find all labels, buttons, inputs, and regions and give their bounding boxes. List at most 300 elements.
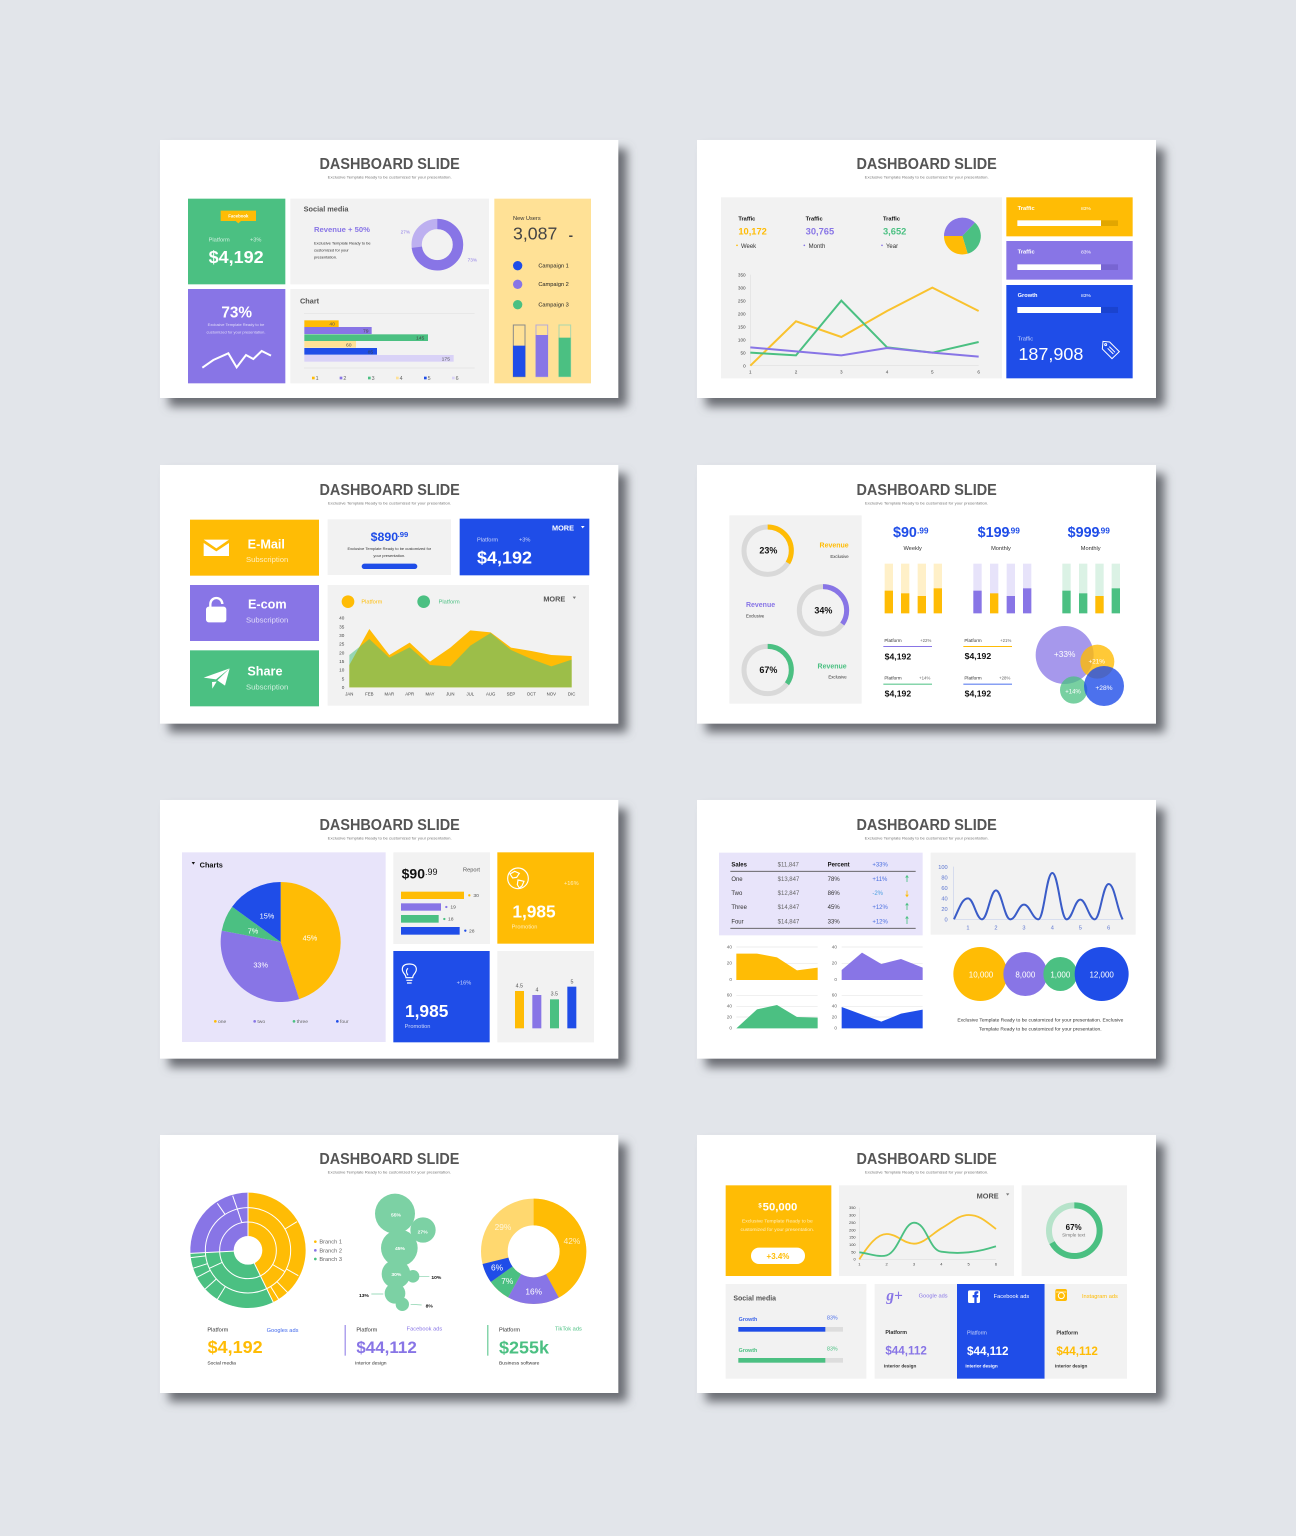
subtitle: Exclusive Template Ready to be customized for your presentation. xyxy=(328,835,452,840)
area chart yellow: 0 xyxy=(729,977,732,982)
panel: report: 30 xyxy=(473,893,479,899)
panel: sales table: Three xyxy=(731,905,748,911)
panel: facebook ads: Interior design xyxy=(965,1364,998,1369)
stat: social media: Googles ads xyxy=(267,1328,299,1334)
panel: instagram ads: Interior design xyxy=(1055,1364,1087,1369)
venn bubbles: +14% xyxy=(1065,689,1081,695)
panel: bar chart: 85 xyxy=(368,349,373,355)
platform stats: +28% xyxy=(999,675,1010,680)
panel: price: Exclusive Template Ready to be customized for xyxy=(348,546,432,551)
panel: bar chart: 4 xyxy=(400,376,403,382)
panel: traffic yellow: Traffic xyxy=(1018,206,1035,212)
panel: price: .99 xyxy=(398,530,408,539)
panel: area chart: 5 xyxy=(342,676,345,681)
panel: promotion blue: +16% xyxy=(457,981,471,987)
panel: traffic yellow: 83% xyxy=(1081,206,1092,212)
donut chart: 29% xyxy=(495,1222,512,1232)
platform stats: +22% xyxy=(920,638,931,643)
panel: new users xyxy=(494,199,591,383)
subtitle: Exclusive Template Ready to be customized for your presentation. xyxy=(865,835,989,840)
panel: growth blue: Traffic xyxy=(1018,336,1033,342)
panel: wave chart: 60 xyxy=(941,886,948,892)
donut chart xyxy=(491,1212,581,1296)
panel: social media: presentation. xyxy=(314,254,337,259)
platform stats: $4,192 xyxy=(885,651,911,661)
panel: curve chart: 200 xyxy=(849,1227,856,1232)
panel: sales table: $14,847 xyxy=(778,905,800,911)
panel: facebook ads xyxy=(957,1284,1045,1379)
bubble chain chart: 8% xyxy=(426,1304,433,1310)
panel: curve chart xyxy=(839,1185,1014,1276)
legend: three xyxy=(297,1019,308,1025)
panel: report: 28 xyxy=(469,928,475,934)
panel: revenue gauges: Revenue xyxy=(746,602,775,609)
panel: e-mail: E-Mail xyxy=(248,537,285,551)
stat: interior design: Interior design xyxy=(355,1361,387,1367)
icon: instagram xyxy=(1055,1289,1067,1301)
number bubbles xyxy=(953,947,1129,1001)
stat: interior design: Facebook ads xyxy=(407,1327,442,1333)
panel: social media growth: Social media xyxy=(733,1296,776,1303)
panel: traffic line chart: Month xyxy=(809,244,825,250)
line chart: 6 xyxy=(977,369,980,374)
panel: report: .99 xyxy=(425,867,437,877)
panel: traffic line chart: 10,172 xyxy=(738,227,767,237)
stat: business software xyxy=(487,1325,582,1367)
panel: e-com: E-com xyxy=(248,598,287,612)
panel: sales table: Two xyxy=(731,891,743,897)
panel: revenue gauges: Exclusive xyxy=(830,554,849,559)
venn bubbles: +21% xyxy=(1088,659,1105,666)
line chart: 3 xyxy=(840,369,843,374)
subtitle: Exclusive Template Ready to be customized for your presentation. xyxy=(865,500,988,505)
panel: area chart: SEP xyxy=(507,691,515,696)
icon: globe xyxy=(508,868,528,889)
panel: small bar chart: 4 xyxy=(536,987,539,993)
panel: promotion blue xyxy=(393,951,490,1042)
panel: area chart: DIC xyxy=(568,691,575,696)
panel: promotion yellow: +16% xyxy=(564,881,579,887)
bubble chain chart: 13% xyxy=(359,1293,370,1299)
panel: instagram ads: Platform xyxy=(1056,1330,1078,1336)
panel: revenue gauges: Revenue xyxy=(820,543,849,550)
panel: 50,000: Exclusive Template Ready to be xyxy=(742,1218,813,1224)
area chart blue xyxy=(832,993,923,1030)
area chart yellow: 40 xyxy=(727,944,732,949)
panel: social media xyxy=(290,199,489,284)
panel: area chart: 40 xyxy=(339,616,345,621)
panel: platform: Platform xyxy=(477,537,498,543)
panel: wave chart: 20 xyxy=(941,907,948,913)
area chart green: 60 xyxy=(727,993,732,998)
panel: social media growth: 83% xyxy=(827,1315,838,1321)
panel: e-com xyxy=(190,585,319,641)
sunburst legend xyxy=(314,1240,342,1263)
panel: area chart: JUN xyxy=(446,691,455,696)
panel: platform: +3% xyxy=(519,537,530,543)
area chart purple: 0 xyxy=(834,977,837,982)
panel: new users: Campaign 3 xyxy=(538,302,569,308)
panel: gauge 67%: Simple text xyxy=(1062,1233,1086,1238)
panel: new users: 3,087 xyxy=(513,223,557,243)
panel: report: 18 xyxy=(448,917,454,923)
panel: instagram ads: Instagram ads xyxy=(1082,1294,1118,1300)
panel: sales table: $13,847 xyxy=(778,877,800,883)
panel: sales table: Four xyxy=(731,919,744,925)
line chart: 50 xyxy=(740,350,746,355)
panel: growth blue: Growth xyxy=(1018,293,1038,299)
caption xyxy=(957,1018,1124,1032)
gauge 23%: 23% xyxy=(759,546,777,556)
panel: instagram ads: $44,112 xyxy=(1056,1345,1098,1358)
bubble chain chart xyxy=(359,1194,442,1311)
icon: price tag xyxy=(1102,341,1119,359)
pie: 45% xyxy=(303,933,318,942)
area chart blue: 20 xyxy=(832,1014,837,1019)
platform stats: +14% xyxy=(919,675,930,680)
panel: gauge 67%: 67% xyxy=(1066,1223,1082,1232)
gauge 23% xyxy=(744,527,791,574)
panel: 73 percent: 73% xyxy=(221,305,252,322)
panel: facebook platform: Platform xyxy=(209,237,230,243)
panel: platform: MORE xyxy=(552,524,574,533)
panel: sales table: +12% xyxy=(872,905,888,911)
panel: area chart: 35 xyxy=(339,624,345,629)
price monthly green with bars: .99 xyxy=(1098,525,1110,535)
panel: small bar chart: 5 xyxy=(571,979,574,985)
number bubbles: 1,000 xyxy=(1050,971,1071,980)
panel: share xyxy=(190,650,319,706)
price monthly with bars: $199 xyxy=(978,525,1010,541)
panel: gauge 67% xyxy=(1022,1185,1127,1276)
panel: new users: Campaign 1 xyxy=(538,263,569,269)
stat: social media: Social media xyxy=(207,1361,236,1367)
stat: interior design: Platform xyxy=(356,1327,378,1333)
panel: sales table: +12% xyxy=(872,919,888,925)
panel: curve chart: 6 xyxy=(995,1262,998,1267)
panel: sales table: $11,847 xyxy=(778,863,800,869)
panel: social media growth xyxy=(726,1284,866,1379)
icon: envelope xyxy=(204,540,229,556)
panel: sales table: 45% xyxy=(828,905,840,911)
panel: area chart: MORE xyxy=(543,595,565,604)
panel: revenue gauges: Exclusive xyxy=(746,614,765,619)
panel: curve chart: 1 xyxy=(858,1262,861,1267)
slide 5: charts dashboard xyxy=(160,800,627,1067)
panel: sales table: +33% xyxy=(872,863,888,869)
panel: promotion yellow xyxy=(497,852,594,944)
panel: area chart: Platform xyxy=(361,599,383,605)
number bubbles: 10,000 xyxy=(969,971,994,980)
number bubbles: 8,000 xyxy=(1015,971,1036,980)
legend xyxy=(214,1019,349,1025)
panel: platform xyxy=(460,519,589,575)
gauge 67% xyxy=(744,646,791,694)
bubble chain chart: 45% xyxy=(395,1246,406,1252)
panel: area chart: Platform xyxy=(439,599,460,605)
panel: facebook platform xyxy=(188,199,285,284)
panel: social media: Exclusive Template Ready to be xyxy=(314,240,371,245)
panel: curve chart: 150 xyxy=(849,1235,856,1240)
panel: sales table: -2% xyxy=(872,891,884,897)
subtitle: Exclusive Template Ready to be customized for your presentation. xyxy=(865,174,989,179)
icon: google plus: g+ xyxy=(885,1288,903,1305)
panel: 50,000: customized for your presentation. xyxy=(740,1227,814,1233)
panel: area chart: JAN xyxy=(345,691,353,696)
stat: business software: Business software xyxy=(499,1361,540,1367)
title: DASHBOARD SLIDE xyxy=(319,156,460,173)
slide 7: platforms dashboard xyxy=(160,1135,627,1402)
panel: platform: $4,192 xyxy=(477,547,532,567)
panel: share: Subscription xyxy=(246,683,288,692)
price weekly with bars xyxy=(885,525,942,613)
title: DASHBOARD SLIDE xyxy=(319,1151,460,1168)
price monthly with bars xyxy=(973,525,1031,613)
donut chart: 7% xyxy=(501,1276,514,1286)
panel: curve chart: 3 xyxy=(913,1262,916,1267)
area chart green: 0 xyxy=(729,1025,732,1030)
panel: promotion yellow: Promotion xyxy=(512,925,537,931)
gauge 67%: 67% xyxy=(759,665,777,675)
gauge 34%: 34% xyxy=(814,605,832,615)
area chart green xyxy=(727,993,818,1030)
panel: 73 percent xyxy=(188,289,285,383)
area chart yellow: 20 xyxy=(727,961,732,966)
panel: bar chart: 145 xyxy=(416,336,425,342)
panel: facebook platform: $4,192 xyxy=(209,247,264,267)
panel: curve chart: 0 xyxy=(853,1257,856,1262)
panel: wave chart: 0 xyxy=(945,917,948,923)
line chart: 1 xyxy=(749,369,752,374)
panel: google ads: Platform xyxy=(885,1330,907,1336)
panel: area chart: FEB xyxy=(365,691,374,696)
panel: curve chart: 100 xyxy=(849,1242,856,1247)
line chart: 250 xyxy=(738,298,746,303)
panel: bar chart: 2 xyxy=(343,376,346,382)
panel: social media growth: Growth xyxy=(739,1317,757,1323)
price monthly green with bars xyxy=(1062,525,1120,613)
panel: traffic line chart: Traffic xyxy=(806,217,823,223)
panel: social media: Revenue + 50% xyxy=(314,225,370,234)
stat: social media: Platform xyxy=(207,1327,229,1333)
icon: lock xyxy=(206,598,226,622)
panel: report: $90 xyxy=(402,866,425,882)
area chart green: 40 xyxy=(727,1004,732,1009)
bubble chain chart: 10% xyxy=(431,1275,442,1281)
panel: traffic yellow xyxy=(1006,197,1133,236)
sunburst legend: Branch 3 xyxy=(319,1257,342,1263)
panel: 73 percent: Exclusive Template Ready to be xyxy=(208,322,265,327)
panel: 50,000: +3.4% xyxy=(767,1252,789,1261)
panel: curve chart: 350 xyxy=(849,1205,856,1210)
panel: promotion blue: 1,985 xyxy=(405,1001,449,1021)
panel: curve chart: MORE xyxy=(977,1192,999,1201)
panel: sales table: +11% xyxy=(872,877,888,883)
panel: area chart: 25 xyxy=(339,642,345,647)
panel: sales table: 78% xyxy=(828,877,840,883)
donut chart: 42% xyxy=(564,1236,581,1246)
panel: 50,000: $ xyxy=(758,1204,762,1210)
area chart green: 20 xyxy=(727,1014,732,1019)
bubble chain chart: 30% xyxy=(391,1272,402,1278)
panel: wave chart: 100 xyxy=(938,865,948,871)
pie: 33% xyxy=(253,961,268,970)
title: DASHBOARD SLIDE xyxy=(856,1151,997,1168)
panel: curve chart: 250 xyxy=(849,1220,856,1225)
platform stats: $4,192 xyxy=(965,651,991,661)
panel: bar chart: Chart xyxy=(300,296,320,305)
area chart yellow xyxy=(727,944,818,982)
slide 3: subscriptions dashboard xyxy=(160,465,627,732)
slide 1: social media dashboard xyxy=(160,140,627,407)
line chart: 150 xyxy=(738,324,746,329)
icon: paper plane xyxy=(204,668,230,689)
panel: facebook ads: Facebook ads xyxy=(994,1294,1029,1300)
panel: revenue gauges: Revenue xyxy=(818,664,847,671)
subtitle: Exclusive Template Ready to be customized for your presentation. xyxy=(328,500,451,505)
platform stats: Platform xyxy=(884,675,902,680)
panel: bar chart: 6 xyxy=(456,376,459,382)
price monthly green with bars: Monthly xyxy=(1081,546,1101,552)
panel: bar chart: 3 xyxy=(372,376,375,382)
panel: social media: 73% xyxy=(468,257,477,262)
panel: traffic line chart: 30,765 xyxy=(806,227,834,237)
panel: facebook ads: Platform xyxy=(967,1330,987,1336)
panel: area chart: 15 xyxy=(339,659,345,664)
panel: google ads xyxy=(875,1284,957,1379)
number bubbles: 12,000 xyxy=(1089,971,1114,980)
panel: social media: Social media xyxy=(304,205,349,214)
venn bubbles xyxy=(1036,626,1124,706)
subtitle: Exclusive Template Ready to be customized for your presentation. xyxy=(865,1169,988,1174)
sunburst legend: Branch 2 xyxy=(319,1248,342,1254)
slide 2: traffic dashboard xyxy=(697,140,1165,407)
pie: 15% xyxy=(260,912,275,921)
panel: bar chart: 1 xyxy=(316,376,319,382)
panel: area chart: APR xyxy=(405,691,414,696)
panel: bar chart: 79 xyxy=(363,329,369,335)
panel: area chart: MAR xyxy=(385,691,394,696)
panel: pie chart xyxy=(182,852,386,1042)
panel: sales table: 33% xyxy=(828,919,840,925)
panel: small bar chart: 4.5 xyxy=(516,983,523,989)
price monthly with bars: .99 xyxy=(1008,525,1020,535)
caption: Exclusive Template Ready to be customized for your presentation. Exclusive xyxy=(957,1018,1124,1023)
panel: sales table xyxy=(719,853,923,935)
panel: curve chart: 2 xyxy=(886,1262,889,1267)
panel: e-mail: Subscription xyxy=(246,555,288,564)
pie chart xyxy=(944,218,981,254)
legend: four xyxy=(340,1019,349,1025)
panel: area chart: NOV xyxy=(547,691,556,696)
panel: traffic purple: Traffic xyxy=(1018,250,1035,256)
panel: bar chart: 60 xyxy=(346,342,352,348)
panel: bar chart xyxy=(290,289,489,383)
panel: traffic line chart: Year xyxy=(886,244,898,250)
area chart purple: 20 xyxy=(832,961,837,966)
panel: area chart: AUG xyxy=(486,691,496,696)
stat: social media xyxy=(207,1327,299,1367)
panel: report: 19 xyxy=(450,905,456,911)
panel: report xyxy=(393,852,490,944)
panel: share: Share xyxy=(247,665,283,679)
panel: area chart: JUL xyxy=(466,691,475,696)
panel: promotion blue: Promotion xyxy=(405,1024,430,1030)
panel: 73 percent: customized for your presentation. xyxy=(207,329,265,334)
panel: new users: - xyxy=(569,227,573,242)
panel: new users: Campaign 2 xyxy=(538,282,569,288)
panel: area chart: 10 xyxy=(339,668,345,673)
panel: 50,000 xyxy=(726,1185,831,1276)
area chart purple xyxy=(832,944,923,982)
line chart: 350 xyxy=(738,272,746,277)
panel: area chart: 20 xyxy=(339,650,345,655)
title: DASHBOARD SLIDE xyxy=(319,817,460,834)
trend arrows xyxy=(906,876,908,924)
panel: traffic line chart xyxy=(721,197,1002,378)
line chart: 2 xyxy=(795,369,798,374)
platform stats: Platform xyxy=(964,638,982,643)
panel: curve chart: 300 xyxy=(849,1212,856,1217)
panel: google ads: $44,112 xyxy=(885,1345,927,1358)
panel: report: Report xyxy=(463,868,480,874)
subtitle: Exclusive Template Ready to be customized for your presentation. xyxy=(328,174,452,179)
venn bubbles: +28% xyxy=(1095,685,1113,692)
panel: wave chart: 6 xyxy=(1107,925,1110,931)
panel: facebook platform: +3% xyxy=(250,237,261,243)
stat: interior design: $44,112 xyxy=(356,1338,417,1357)
panel: revenue gauges: Exclusive xyxy=(828,675,847,680)
slide 8: ads dashboard xyxy=(697,1135,1165,1402)
panel: new users: New Users xyxy=(513,216,541,222)
area chart blue: 0 xyxy=(834,1025,837,1030)
line chart: 300 xyxy=(738,285,746,290)
panel: google ads: Interior design xyxy=(884,1363,916,1368)
platform stats: $4,192 xyxy=(965,689,991,699)
panel: area chart: 0 xyxy=(342,685,345,690)
panel: traffic purple: 83% xyxy=(1081,250,1092,256)
panel: social media growth: 83% xyxy=(827,1346,838,1352)
panel: growth blue xyxy=(1006,285,1133,378)
panel: wave chart xyxy=(931,853,1136,935)
panel: google ads: Google ads xyxy=(919,1294,948,1300)
stat: business software: $255k xyxy=(499,1337,550,1357)
slide 6: sales dashboard xyxy=(697,800,1165,1067)
gauge 34% xyxy=(799,587,847,634)
price weekly with bars: $90 xyxy=(893,525,917,541)
pie xyxy=(221,882,341,1002)
subtitle: Exclusive Template Ready to be customized for your presentation. xyxy=(328,1169,451,1174)
venn bubbles: +33% xyxy=(1054,649,1076,659)
panel: area chart: OCT xyxy=(527,691,536,696)
icon: light bulb xyxy=(402,964,416,983)
panel: e-com: Subscription xyxy=(246,615,288,624)
panel: bar chart: 175 xyxy=(442,356,450,362)
icon: facebook xyxy=(968,1290,980,1303)
panel: e-mail xyxy=(190,520,319,576)
title: DASHBOARD SLIDE xyxy=(856,817,997,834)
panel: promotion yellow: 1,985 xyxy=(512,901,556,921)
price monthly with bars: Monthly xyxy=(991,546,1011,552)
stat: interior design xyxy=(345,1325,442,1367)
panel: growth blue: 83% xyxy=(1081,293,1092,299)
slide 4: revenue dashboard xyxy=(697,465,1165,732)
panel: area chart xyxy=(328,585,589,706)
area chart blue: 40 xyxy=(832,1004,837,1009)
panel: sales table: Sales xyxy=(731,863,748,869)
legend: two xyxy=(257,1019,265,1025)
panel: small bar chart xyxy=(497,951,594,1042)
